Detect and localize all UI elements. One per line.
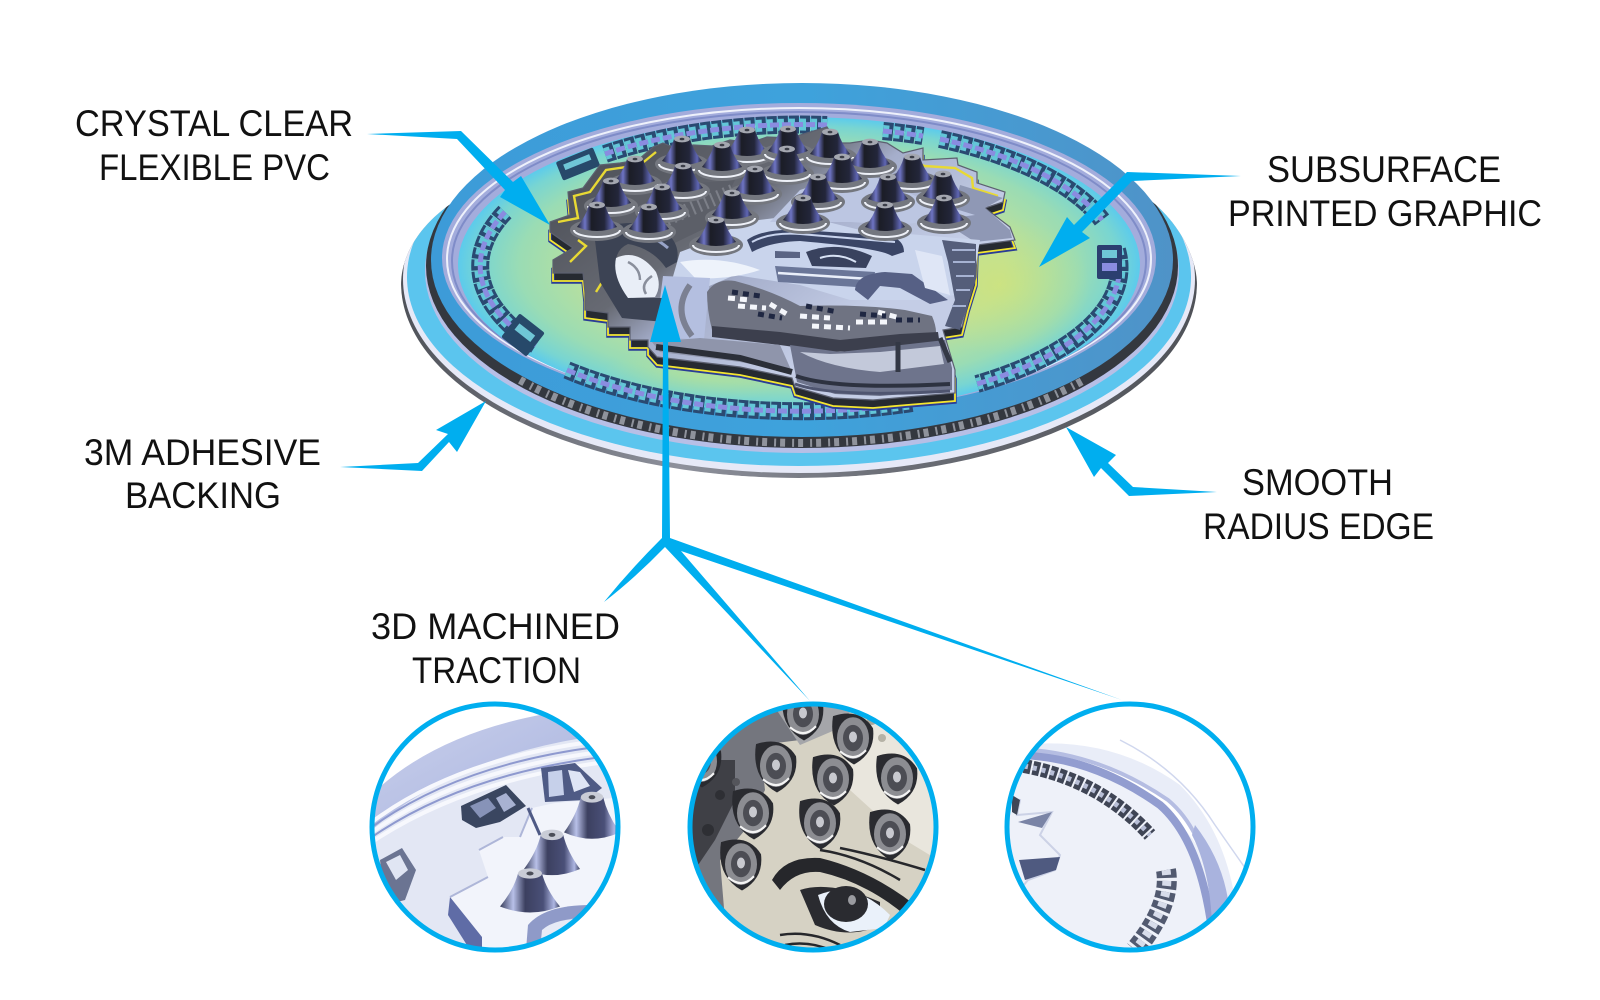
label: crystal clear flexible PVC: CRYSTAL CLEAR	[75, 103, 353, 144]
detail circle: rim and raised gear	[365, 700, 625, 954]
printed graphic floor	[458, 117, 1140, 413]
neck panel	[660, 276, 710, 340]
label: subsurface printed graphic: SUBSURFACE	[1267, 149, 1501, 190]
eyebrow	[772, 858, 909, 911]
raised ear ridge	[526, 905, 587, 944]
label: subsurface printed graphic: PRINTED GRAPHIC	[1228, 193, 1542, 234]
detail circle: radius edge close-up	[1005, 700, 1255, 954]
arrow: crystal clear flexible PVC	[367, 131, 550, 225]
ring letter blocks	[501, 147, 1122, 357]
label: smooth radius edge: RADIUS EDGE	[1203, 506, 1434, 547]
label: 3M adhesive backing: 3M ADHESIVE	[84, 432, 321, 473]
label: subsurface printed graphic	[1228, 149, 1542, 234]
ring lettering	[1024, 766, 1150, 835]
detail circle: printed graphic close-up	[680, 689, 938, 954]
ear	[594, 223, 678, 322]
label: 3D machined traction: 3D MACHINED	[371, 606, 620, 647]
label: crystal clear flexible PVC	[75, 103, 353, 188]
face highlight	[672, 215, 980, 300]
label: 3D machined traction: TRACTION	[412, 650, 581, 691]
eye	[800, 887, 880, 932]
arrow: smooth radius edge	[1066, 427, 1217, 496]
right hair shading	[950, 185, 1012, 242]
label: 3M adhesive backing	[84, 432, 321, 516]
label: smooth radius edge: SMOOTH	[1242, 462, 1393, 503]
right stacked layers	[942, 240, 976, 330]
traction cones	[570, 126, 971, 256]
eye sockets	[775, 240, 976, 330]
rim band	[1038, 744, 1233, 898]
hair yellow inlay	[558, 152, 1006, 292]
relief top face	[550, 127, 1015, 400]
panel: traction pad disc	[401, 83, 1197, 478]
outer flange layers	[401, 201, 1197, 478]
raised gear side	[448, 897, 482, 947]
label: crystal clear flexible PVC: FLEXIBLE PVC	[99, 147, 330, 188]
beard and mouth	[707, 280, 940, 352]
hair stipple	[612, 180, 735, 250]
raised ring lettering	[480, 125, 1120, 411]
arrow: subsurface printed graphic	[1039, 172, 1241, 267]
arrow: 3D machined traction branching leader	[604, 285, 1122, 701]
adhesive band reflected lettering	[520, 380, 1084, 443]
letter blocks	[461, 785, 526, 828]
gear edge	[1016, 798, 1061, 886]
brow ridge	[747, 230, 904, 256]
raised white gear	[450, 797, 625, 950]
skull head relief	[550, 126, 1015, 409]
nose loop	[855, 272, 948, 304]
label: 3M adhesive backing: BACKING	[125, 475, 281, 516]
label: smooth radius edge	[1203, 462, 1434, 547]
blue raised rim	[431, 83, 1173, 437]
gear cones	[500, 792, 620, 912]
inner metal rings	[442, 103, 1156, 413]
ringed cones	[782, 706, 824, 740]
label: 3D machined traction	[371, 606, 620, 691]
arrow: 3M adhesive backing	[340, 401, 486, 471]
jaw and chin layers	[652, 338, 952, 396]
relief side layer	[550, 136, 1015, 409]
